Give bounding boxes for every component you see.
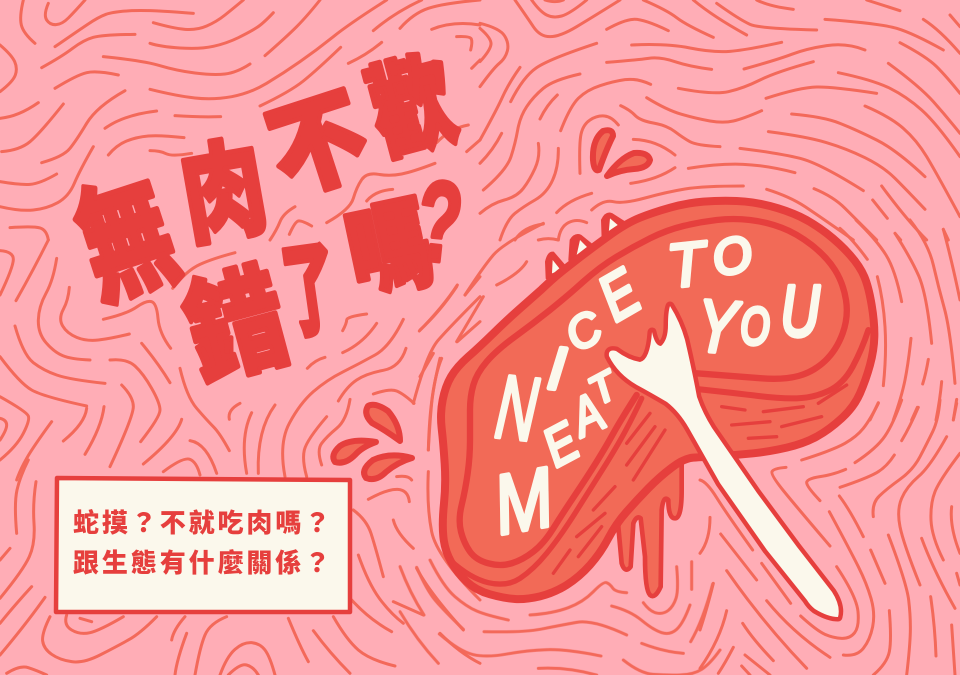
lettering on steak: [487, 225, 820, 553]
letter T: T: [664, 229, 713, 302]
title question mark: ?: [411, 157, 468, 288]
steak lower contour: [697, 330, 868, 398]
drop: lower top: [366, 405, 400, 441]
drop: upper right: [607, 153, 650, 176]
letter I: I: [545, 334, 569, 403]
drop: lower left: [333, 441, 376, 463]
letter C: C: [557, 300, 611, 362]
letter E in MEAT: E: [533, 410, 589, 478]
title character 無: 無: [63, 162, 192, 323]
drop: upper left: [593, 130, 613, 170]
letter O in YOU: O: [740, 297, 770, 355]
title character 嗎: 嗎: [338, 188, 442, 314]
meat grain marks: [553, 385, 847, 573]
callout text line 1: 蛇摸？不就吃肉嗎？: [73, 508, 333, 538]
illustration: steak with fork: [441, 201, 874, 599]
title character 了: 了: [277, 232, 344, 352]
letter O: O: [708, 225, 756, 287]
callout box: [56, 478, 350, 612]
title character 不: 不: [256, 76, 381, 215]
letter M: M: [487, 450, 560, 553]
letter A: A: [560, 382, 613, 449]
title character 歡: 歡: [358, 42, 467, 174]
splash drops above the meat: [593, 130, 650, 176]
steak inner contour: [460, 219, 847, 565]
letter N: N: [492, 355, 543, 460]
steak body: [441, 201, 874, 599]
letter Y: Y: [694, 284, 743, 370]
title character 肉: 肉: [173, 129, 275, 259]
title: 無肉不歡錯了嗎?: [63, 42, 468, 401]
icon: white fork: [609, 306, 839, 617]
steak left contour: [450, 398, 642, 584]
splash drops left of the meat: [333, 405, 412, 479]
letter U: U: [781, 272, 820, 352]
letter T in MEAT: T: [582, 362, 626, 414]
meat drips: [618, 457, 682, 596]
title character 錯: 錯: [173, 253, 300, 401]
callout text line 2: 跟生態有什麼關係？: [73, 548, 333, 578]
steak bone spikes: [546, 213, 627, 278]
drop: lower right: [364, 455, 412, 479]
letter E: E: [587, 256, 653, 335]
